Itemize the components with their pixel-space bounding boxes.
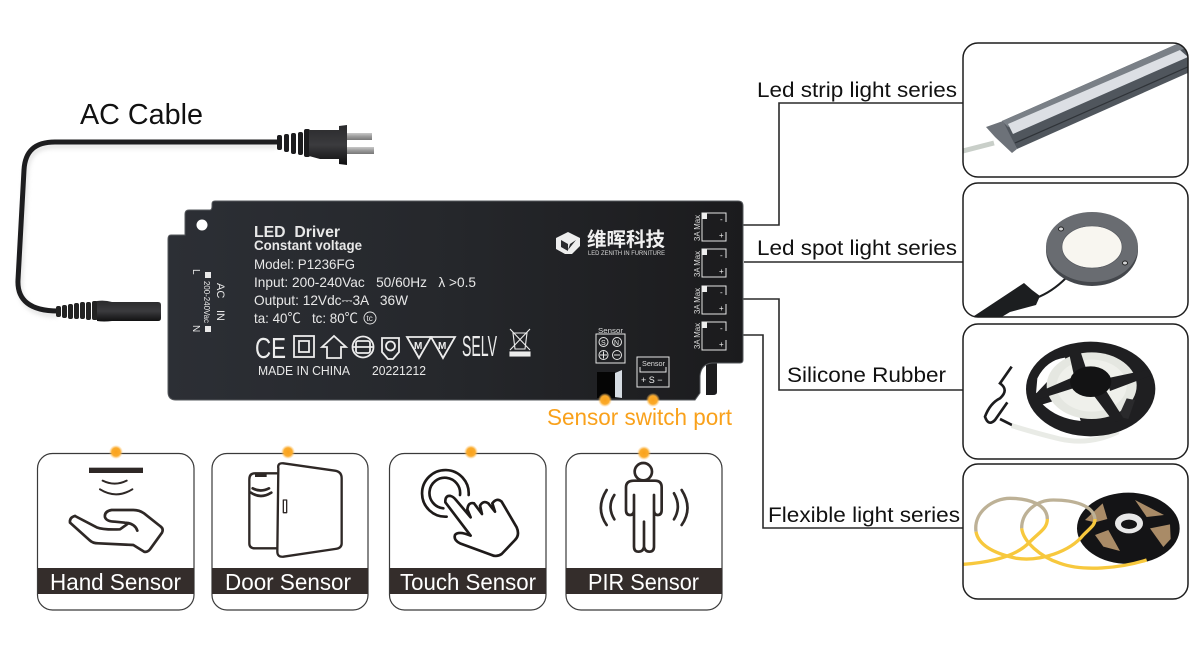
driver specification text: 20221212 (372, 364, 426, 378)
orange marker: Door Sensor (281, 445, 295, 459)
port 3: - (720, 288, 723, 297)
port 2 (693, 249, 726, 277)
sensor card: PIR Sensor (566, 454, 722, 610)
card outline (38, 454, 194, 610)
back of strip loops (976, 498, 1095, 532)
port 4 (693, 322, 726, 350)
port 3 (693, 286, 726, 314)
certification symbols: M (414, 341, 422, 352)
panel: LED strip profile (963, 43, 1190, 177)
panel: flexible light strip (963, 464, 1188, 599)
reel hub (1070, 366, 1111, 397)
label: Sensor switch port: Sensor switch port (547, 404, 733, 430)
end cap (986, 121, 1017, 153)
connection lines to light series (742, 103, 963, 528)
AC input labels: IN (214, 310, 226, 321)
sensor terminal block: S (601, 340, 606, 347)
port 2: + (719, 267, 724, 276)
profile top lip (1002, 44, 1190, 127)
touch icon (422, 470, 518, 556)
wire coil (985, 367, 1013, 426)
WEEE symbol (510, 329, 530, 356)
port 3: + (719, 304, 724, 313)
port 1: - (720, 215, 723, 224)
driver specification text: ta: 40℃ tc: 80℃ (254, 310, 358, 326)
reel disc (1026, 342, 1155, 436)
ring side (1046, 248, 1138, 286)
port 4: 3A Max (693, 323, 702, 349)
AC input labels (190, 269, 226, 332)
light disc (1062, 226, 1122, 268)
door icon (249, 463, 342, 557)
card outline (566, 454, 722, 610)
AC input labels: N (190, 325, 201, 332)
connector ribs (56, 301, 98, 320)
card outline (390, 454, 546, 610)
reel windows (1085, 500, 1171, 551)
label band (38, 568, 194, 594)
panel: LED spot light (963, 183, 1188, 320)
plug head (309, 125, 347, 165)
silicone tail (1012, 426, 1118, 441)
driver body (168, 201, 743, 400)
sensor card: Door Sensor (212, 454, 368, 610)
orange marker: sensor port right (646, 393, 660, 407)
driver specification text: Input: 200-240Vac 50/60Hz λ >0.5 (254, 274, 476, 290)
orange marker: PIR Sensor (637, 446, 651, 460)
aluminium profile (1002, 44, 1190, 149)
label band (566, 568, 722, 594)
label: Led strip light series: Led strip light series (757, 78, 957, 102)
label text: Hand Sensor (50, 569, 181, 595)
diffuser light strip (1008, 50, 1188, 134)
brand logo: 维晖科技 (587, 229, 665, 251)
port 2: 3A Max (693, 251, 702, 277)
certification symbols: M (438, 341, 446, 352)
AC input labels: L (190, 269, 201, 275)
port 4: - (720, 324, 723, 333)
right mounting tab (706, 360, 717, 395)
sensor terminal block: N (614, 340, 619, 347)
port 1 (693, 213, 726, 241)
mounting hole (196, 220, 208, 230)
tc mark ring (364, 312, 376, 324)
sensor port label: + S − (641, 375, 663, 385)
certification symbols (255, 331, 497, 365)
driver specification text: tc (366, 314, 373, 323)
label band (212, 568, 368, 594)
orange marker: Hand Sensor (109, 445, 123, 459)
wire (963, 143, 994, 151)
sensor card: Hand Sensor (38, 454, 194, 610)
label: Silicone Rubber: Silicone Rubber (787, 363, 946, 387)
label band (390, 568, 546, 594)
left reel window (1036, 358, 1066, 394)
port 4: + (719, 340, 724, 349)
spot cable bundle (974, 283, 1040, 316)
output ports (693, 213, 726, 350)
label text: PIR Sensor (588, 569, 699, 595)
sensor terminal block (596, 326, 625, 363)
brand logo: LED ZENITH IN FURNITURE (588, 250, 666, 257)
port 3: 3A Max (693, 288, 702, 314)
reel centre (1115, 513, 1143, 533)
spot cable (1039, 278, 1066, 298)
profile groove (1015, 66, 1190, 143)
label: Flexible light series: Flexible light series (768, 503, 960, 527)
sensor card: Touch Sensor (390, 454, 546, 610)
AC cable with plug and connector (18, 125, 374, 322)
right dark gap (1120, 398, 1134, 418)
port 2: - (720, 251, 723, 260)
label: Led spot light series: Led spot light series (757, 236, 957, 260)
hand icon (70, 468, 163, 552)
black reel (1077, 493, 1180, 564)
screws (1058, 227, 1128, 265)
sensor port label: Sensor (642, 359, 665, 368)
port 1: 3A Max (693, 215, 702, 241)
driver specification text (254, 224, 476, 378)
sensor switch slot (597, 370, 622, 398)
driver specification text: Output: 12Vdc⎓3A 36W (254, 292, 409, 308)
sensor terminal block: Sensor (598, 326, 624, 335)
orange marker: sensor port left (598, 393, 612, 407)
silicone coil (1047, 352, 1137, 419)
plug pins (347, 133, 374, 154)
driver specification text: MADE IN CHINA (258, 364, 351, 378)
heading: AC Cable: AC Cable (80, 99, 203, 131)
AC input labels: AC (214, 283, 226, 298)
certification symbols: CE (255, 333, 286, 365)
driver specification text: Constant voltage (254, 237, 362, 253)
driver specification text: LED Driver (254, 224, 340, 241)
panel: silicone rubber reel (963, 324, 1188, 459)
coil edge (1057, 360, 1127, 412)
orange marker: Touch Sensor (464, 445, 478, 459)
LED driver unit: SELV (462, 331, 497, 363)
ring face (1046, 212, 1138, 282)
sensor port label (637, 357, 669, 387)
front of COB strip (963, 519, 1147, 568)
driver specification text: Model: P1236FG (254, 256, 355, 272)
bottom-left reel window (1042, 402, 1081, 421)
card outline (212, 454, 368, 610)
port 1: + (719, 231, 724, 240)
brand logo (556, 229, 666, 257)
person icon (601, 463, 687, 552)
reel centre hub (1121, 520, 1137, 529)
LED driver unit (168, 201, 743, 400)
label text: Door Sensor (225, 569, 351, 595)
female connector (97, 301, 161, 322)
reel spokes (1070, 353, 1086, 374)
label text: Touch Sensor (400, 569, 536, 595)
plug strain relief (277, 129, 310, 157)
AC input labels: 200-240Vac (202, 281, 212, 324)
